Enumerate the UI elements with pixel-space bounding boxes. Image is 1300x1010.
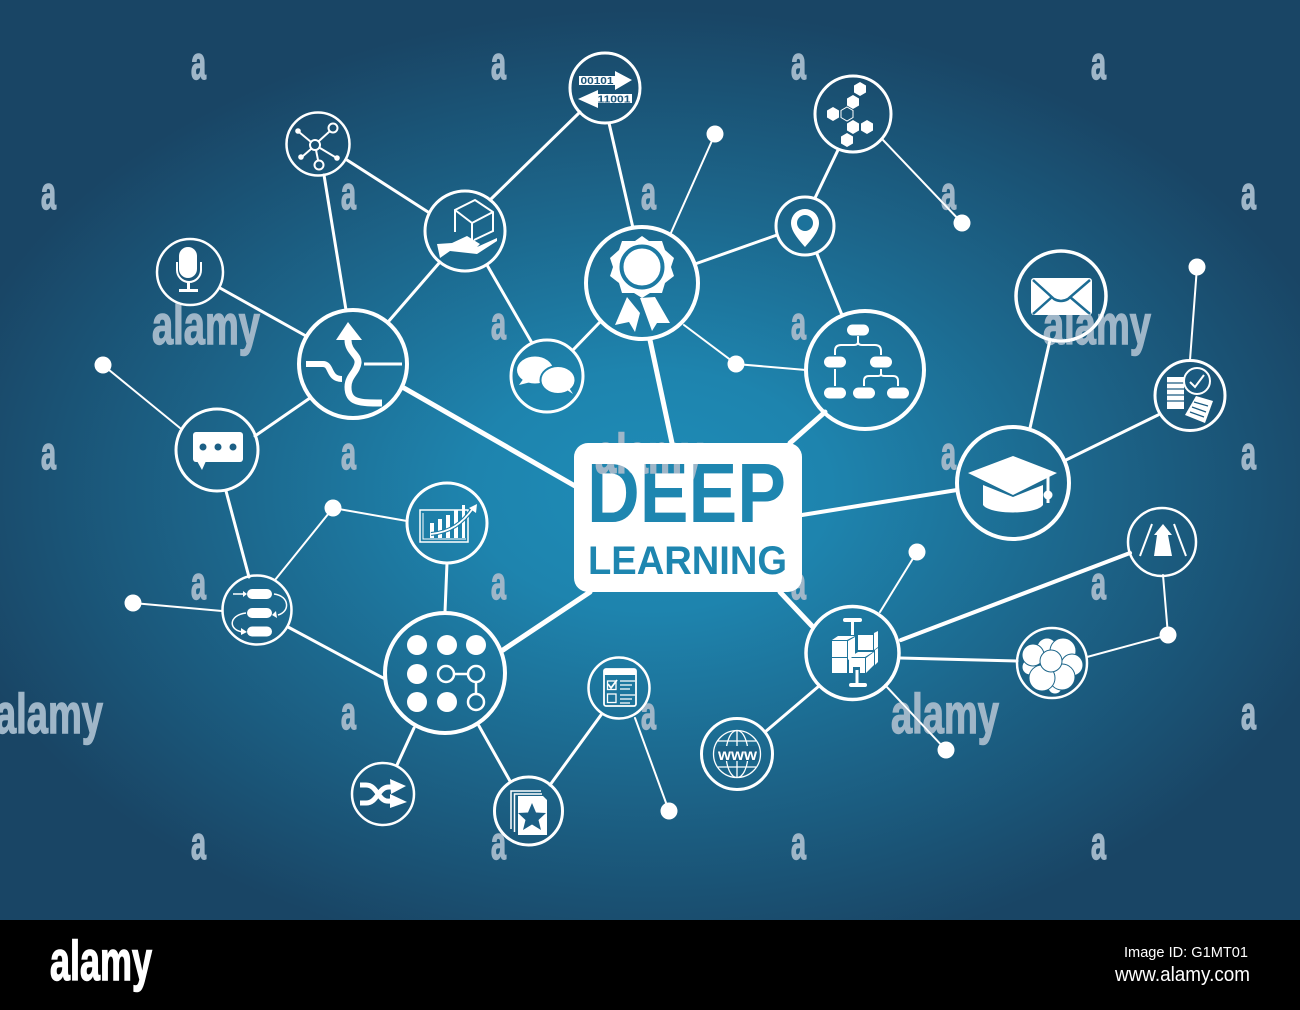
watermark pattern: a [341, 427, 356, 479]
watermark pattern: a [791, 37, 806, 89]
icon: microphone [157, 239, 223, 305]
icon: speech bubbles [511, 340, 583, 412]
watermark pattern: a [1091, 37, 1106, 89]
title: DEEP: DEEP [587, 446, 786, 540]
watermark pattern: a [941, 427, 956, 479]
image id: Image ID: G1MT01 [1124, 944, 1248, 961]
watermark pattern: a [791, 557, 806, 609]
watermark pattern: a [491, 297, 506, 349]
icon: network hub [286, 112, 350, 176]
watermark pattern: a [191, 817, 206, 869]
watermark pattern: a [491, 817, 506, 869]
icon: flower cluster [1017, 628, 1087, 698]
watermark pattern: a [1241, 687, 1256, 739]
watermark pattern: alamy [1043, 293, 1151, 356]
watermark pattern: a [41, 427, 56, 479]
watermark pattern: a [1241, 167, 1256, 219]
icon: data cube [806, 606, 899, 700]
icon: form checklist [588, 658, 650, 718]
watermark pattern: alamy [595, 422, 703, 485]
watermark pattern: alamy [152, 293, 260, 356]
icon: rising bar chart [407, 483, 487, 563]
watermark pattern: a [491, 557, 506, 609]
watermark pattern: a [491, 37, 506, 89]
icon: award rosette [586, 227, 698, 339]
icon: hand holding box [425, 191, 505, 271]
watermark pattern: a [1091, 817, 1106, 869]
icon: envelope [1016, 251, 1106, 341]
watermark pattern: a [341, 167, 356, 219]
watermark pattern: alamy [891, 682, 999, 745]
watermark pattern: a [641, 687, 656, 739]
watermark pattern: a [941, 167, 956, 219]
icon: pattern lock grid [385, 613, 505, 733]
watermark pattern: a [791, 297, 806, 349]
title: LEARNING: LEARNING [588, 539, 787, 583]
footer logo: alamy [50, 929, 152, 992]
watermark pattern: a [641, 167, 656, 219]
icon: www globe: www [717, 747, 758, 764]
icon: www globe [702, 718, 772, 790]
watermark pattern: a [341, 687, 356, 739]
central title card [574, 443, 802, 592]
icon: road arrow [1128, 508, 1196, 576]
icon: binary data exchange [570, 53, 640, 123]
website: www.alamy.com [1114, 964, 1250, 986]
small end-point dots [94, 126, 1206, 820]
icon: binary data exchange: 11001 [598, 94, 631, 106]
watermark pattern: a [1241, 427, 1256, 479]
icon: graduation cap [957, 427, 1069, 539]
connector lines [103, 112, 1197, 811]
watermark pattern: a [191, 557, 206, 609]
watermark pattern: a [41, 167, 56, 219]
icon: molecule hexagons [815, 76, 891, 152]
icon: chat bubble with dots [176, 409, 258, 491]
watermark pattern: a [791, 817, 806, 869]
watermark pattern: a [191, 37, 206, 89]
watermark pattern [0, 37, 1256, 869]
icon: starred document stack [494, 777, 562, 845]
icon: process flow [222, 576, 292, 644]
icon: hierarchy chart [806, 311, 924, 429]
icon: binary data exchange: 00101 [580, 76, 614, 87]
icon: shuffle arrows [352, 763, 414, 825]
watermark pattern: a [1091, 557, 1106, 609]
icon: document with check [1155, 360, 1225, 430]
footer bar [0, 920, 1300, 1010]
icon: path with arrow [299, 310, 407, 418]
icon: location pin [776, 197, 834, 255]
